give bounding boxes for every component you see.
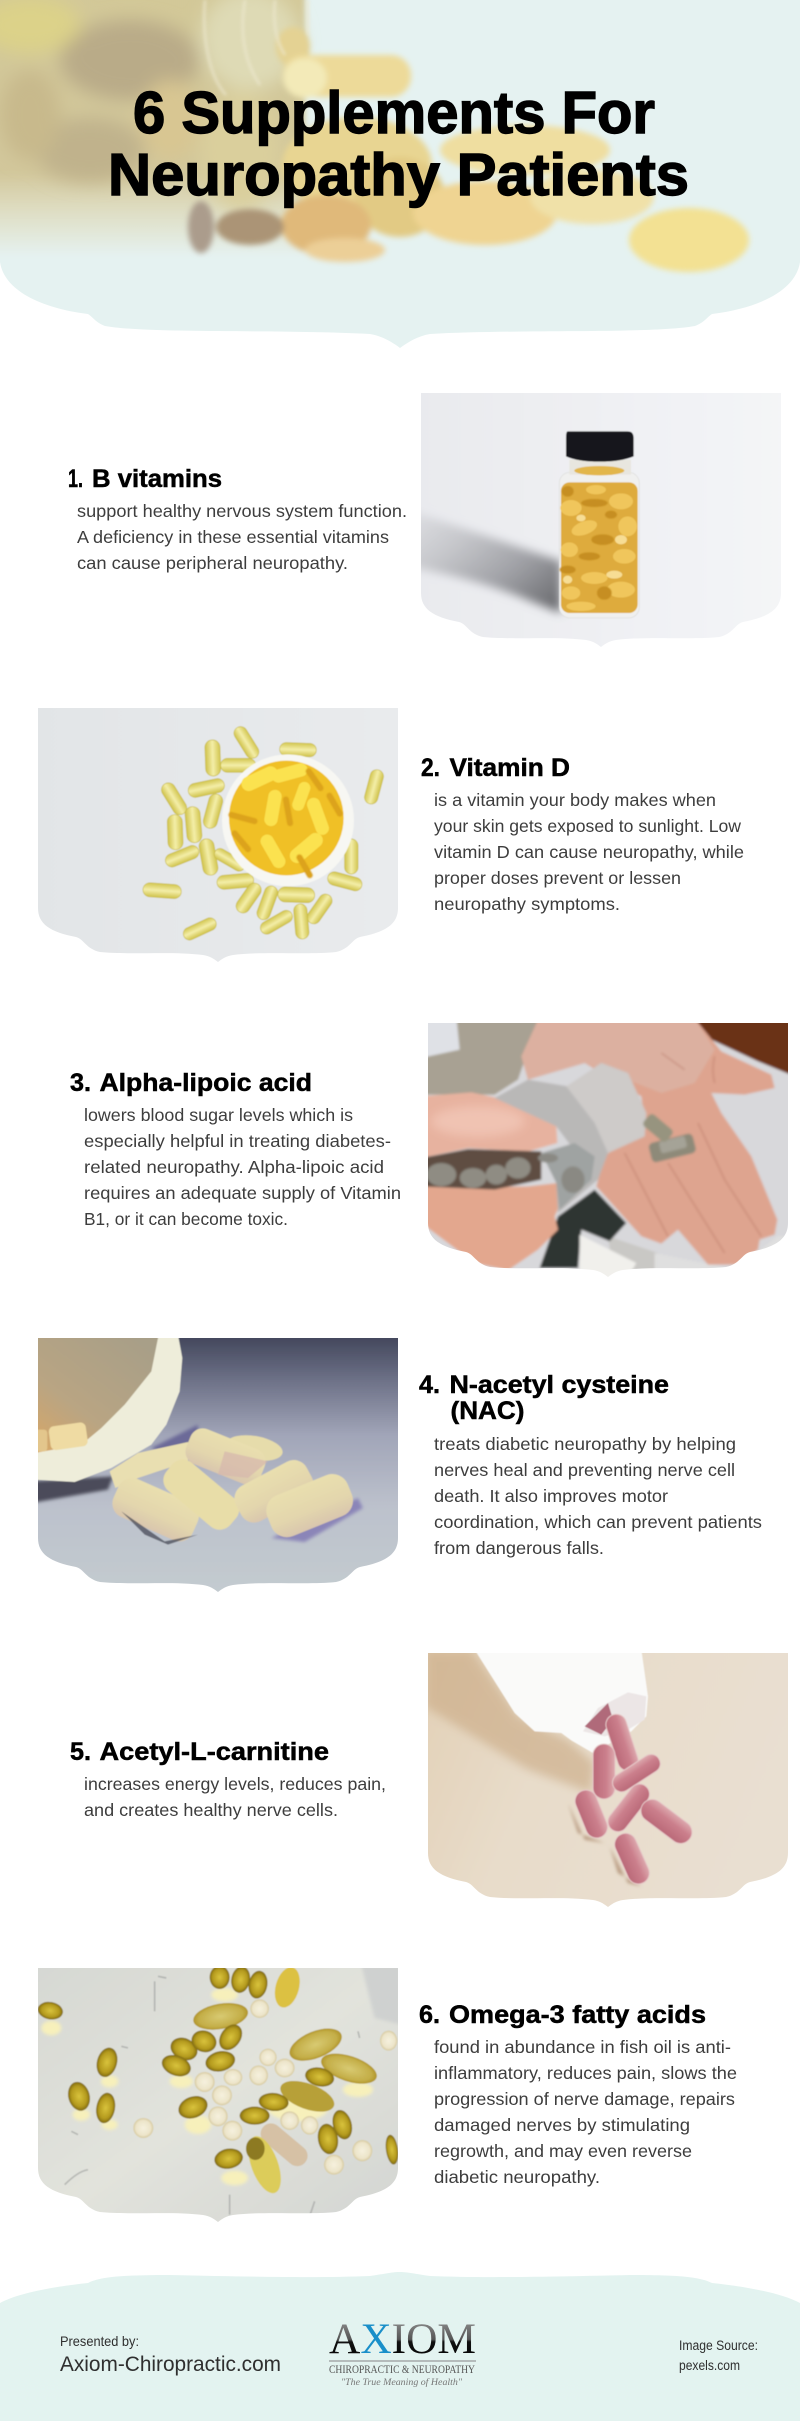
title [108,80,689,208]
image: pills poured into a hand [421,1016,795,1286]
image source credit: Image Source: [679,2338,758,2353]
text: Acetyl-L-carnitine description: increases energy levels, reduces pain, [84,1774,386,1794]
heading: B vitamins: B vitamins [92,465,222,493]
section 6: Omega-3 fatty acids [35,1964,737,2228]
image: capsule bottle [408,390,784,653]
text: Omega-3 description: diabetic neuropathy. [434,2167,600,2187]
text: N-acetyl cysteine description: from dangerous falls. [434,1538,604,1558]
text: Acetyl-L-carnitine description: and creates healthy nerve cells. [84,1800,338,1820]
text: Vitamin D description: your skin gets exposed to sunlight. Low [434,816,741,836]
logo: Axiom Chiropractic and Neuropathy: CHIROPRACTIC & NEUROPATHY [329,2362,475,2376]
text: Alpha-lipoic acid description [84,1105,401,1229]
logo: Axiom Chiropractic and Neuropathy: "The True Meaning of Health" [341,2377,463,2388]
heading: Omega-3 fatty acids: Omega-3 fatty acids [449,2001,706,2029]
heading: Vitamin D: 2. [421,754,440,782]
text: Vitamin D description: is a vitamin your body makes when [434,790,716,810]
text: Vitamin D description: proper doses prevent or lessen [434,868,681,888]
image: beige tablets spilled from bottle [31,1335,401,1598]
logo: Axiom Chiropractic and Neuropathy: AXIOM [329,2316,476,2363]
text: Alpha-lipoic acid description: requires an adequate supply of Vitamin [84,1183,401,1203]
text: B vitamins description [77,501,407,573]
text: B vitamins description: A deficiency in these essential vitamins [77,527,389,547]
heading: B vitamins: 1. [68,465,83,493]
presented by credit [60,2333,281,2376]
text: Omega-3 description [434,2037,737,2187]
text: Vitamin D description: neuropathy symptoms. [434,894,620,914]
text: Alpha-lipoic acid description: especially helpful in treating diabetes- [84,1131,391,1151]
text: B vitamins description: can cause peripheral neuropathy. [77,553,348,573]
text: Vitamin D description: vitamin D can cause neuropathy, while [434,842,744,862]
text: Omega-3 description: found in abundance in fish oil is anti- [434,2037,731,2057]
heading: N-acetyl cysteine (NAC): (NAC) [450,1397,524,1425]
text: N-acetyl cysteine description: treats diabetic neuropathy by helping [434,1434,736,1454]
section 5: Acetyl-L-carnitine [70,1650,791,1913]
presented by credit: Presented by: [60,2333,139,2349]
logo: Axiom Chiropractic and Neuropathy [329,2316,476,2388]
heading: Alpha-lipoic acid: 3. [70,1069,91,1097]
heading: Alpha-lipoic acid: Alpha-lipoic acid [100,1069,312,1097]
heading: N-acetyl cysteine (NAC): 4. [419,1371,440,1399]
image: pink capsules spilled from white bottle [425,1650,791,1913]
heading: Acetyl-L-carnitine: 5. [70,1738,91,1766]
text: Alpha-lipoic acid description: B1, or it can become toxic. [84,1209,288,1229]
footer band [0,2272,800,2421]
image: bowl of vitamin D softgels [35,705,401,968]
text: Omega-3 description: damaged nerves by stimulating [434,2115,690,2135]
image: omega-3 softgels on marble [35,1964,401,2228]
title: 6 Supplements For [133,80,655,146]
heading: Vitamin D: Vitamin D [450,754,570,782]
heading: N-acetyl cysteine (NAC) [419,1371,669,1425]
text: Alpha-lipoic acid description: related neuropathy. Alpha-lipoic acid [84,1157,384,1177]
heading: Acetyl-L-carnitine: Acetyl-L-carnitine [100,1738,329,1766]
section 4: N-acetyl cysteine [31,1335,762,1598]
section 3: Alpha-lipoic acid [70,1016,795,1286]
title: Neuropathy Patients [108,142,689,208]
text: Vitamin D description [434,790,744,914]
text: B vitamins description: support healthy nervous system function. [77,501,407,521]
section 2: Vitamin D [35,705,744,968]
text: N-acetyl cysteine description: death. It also improves motor [434,1486,668,1506]
header banner with faded capsule photo [0,0,800,350]
text: Alpha-lipoic acid description: lowers blood sugar levels which is [84,1105,353,1125]
heading: Omega-3 fatty acids: 6. [419,2001,440,2029]
image source credit [679,2338,758,2373]
text: Omega-3 description: regrowth, and may even reverse [434,2141,692,2161]
text: Omega-3 description: progression of nerve damage, repairs [434,2089,735,2109]
text: N-acetyl cysteine description [434,1434,762,1558]
section 1: B vitamins [68,390,784,653]
text: Omega-3 description: inflammatory, reduces pain, slows the [434,2063,737,2083]
text: N-acetyl cysteine description: coordination, which can prevent patients [434,1512,762,1532]
image source credit: pexels.com [679,2358,740,2373]
heading: N-acetyl cysteine (NAC): N-acetyl cysteine [450,1371,669,1399]
presented by credit: Axiom-Chiropractic.com [60,2353,281,2376]
text: Acetyl-L-carnitine description [84,1774,386,1820]
text: N-acetyl cysteine description: nerves heal and preventing nerve cell [434,1460,735,1480]
